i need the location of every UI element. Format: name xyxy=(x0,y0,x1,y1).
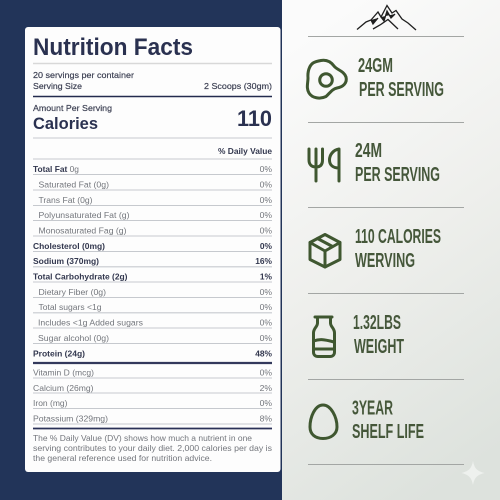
row: sugar alcohol xyxy=(38,333,272,343)
weight text: WEIGHT xyxy=(354,336,404,358)
row: total sugars: Total sugars <1g xyxy=(38,302,102,312)
row: sodium: Sodium (370mg) xyxy=(33,256,99,266)
row: total fat xyxy=(33,164,272,174)
footnote: serving contributes to your daily diet. 2,000 calories per day is xyxy=(33,443,272,453)
serving size: 2 Scoops (30gm) xyxy=(204,81,272,91)
shelf life text: 3YEAR xyxy=(352,398,393,420)
row: sugar alcohol: 0% xyxy=(260,333,272,343)
panel: nutrition facts label xyxy=(25,27,280,472)
row: total sugars xyxy=(38,302,272,312)
icon: fork and spoon xyxy=(309,149,339,181)
calories: 110 xyxy=(237,106,272,131)
row: cholesterol xyxy=(33,241,273,251)
icon: sparkle xyxy=(462,461,484,485)
row: added sugars xyxy=(38,318,272,328)
icon: bottle xyxy=(314,317,334,356)
row: total sugars: 0% xyxy=(260,302,272,312)
row: monosaturated fat xyxy=(38,226,272,236)
daily value heading: % Daily Value xyxy=(218,146,272,156)
item: protein xyxy=(307,55,444,101)
item: per serving xyxy=(309,140,440,186)
row: total fat: 0% xyxy=(260,164,272,174)
dividers xyxy=(308,36,464,464)
right background panel xyxy=(282,0,500,500)
serving size: Serving Size xyxy=(33,81,82,91)
weight text xyxy=(353,312,404,358)
row: vitamin d: 0% xyxy=(260,368,272,378)
item: weight xyxy=(314,312,404,358)
row: saturated fat xyxy=(38,180,272,190)
row: iron: 0% xyxy=(260,398,272,408)
row: protein: 48% xyxy=(255,348,273,358)
footnote: The % Daily Value (DV) shows how much a nutrient in one xyxy=(33,433,252,443)
protein text: 24GM xyxy=(358,55,393,77)
item: shelf life xyxy=(310,398,424,443)
row: sodium: 16% xyxy=(255,256,273,266)
calories text: WERVING xyxy=(355,250,415,272)
row: dietary fiber xyxy=(38,287,272,297)
icon: mountains xyxy=(357,6,416,30)
row: sugar alcohol: Sugar alcohol (0g) xyxy=(38,333,109,343)
row: vitamin d xyxy=(33,368,272,378)
servings per container: 20 servings per container xyxy=(33,70,134,80)
shelf life text xyxy=(352,398,424,443)
serving size xyxy=(33,81,272,91)
row: saturated fat: 0% xyxy=(260,180,272,190)
row: calcium: Calcium (26mg) xyxy=(33,383,94,393)
footnote xyxy=(33,433,272,463)
left navy background panel xyxy=(0,0,282,500)
row: total carbohydrate: Total Carbohydrate (2g) xyxy=(33,272,128,282)
row: polyunsaturated fat xyxy=(38,210,272,220)
row: protein xyxy=(33,348,273,358)
row: vitamin d: Vitamin D (mcg) xyxy=(33,368,94,378)
row: polyunsaturated fat: 0% xyxy=(260,210,272,220)
row: iron: Iron (mg) xyxy=(33,398,68,408)
row: dietary fiber: Dietary Fiber (0g) xyxy=(38,287,106,297)
shelf life text: SHELF LIFE xyxy=(352,421,424,443)
calories text: 110 CALORIES xyxy=(355,226,441,248)
row: iron xyxy=(33,398,272,408)
row: trans fat xyxy=(38,195,272,205)
per serving text xyxy=(355,140,440,186)
row: cholesterol: 0% xyxy=(260,241,273,251)
weight text: 1.32LBS xyxy=(353,312,401,334)
protein text: PER SERVING xyxy=(359,79,444,101)
calories xyxy=(33,106,272,133)
row: cholesterol: Cholesterol (0mg) xyxy=(33,241,105,251)
amount per serving: Amount Per Serving xyxy=(33,103,112,113)
row: added sugars: 0% xyxy=(260,318,272,328)
calories: Calories xyxy=(33,114,98,133)
row: sodium xyxy=(33,256,273,266)
row: polyunsaturated fat: Polyunsaturated Fat (g) xyxy=(38,210,130,220)
row: monosaturated fat: Monosaturated Fag (g) xyxy=(38,226,127,236)
protein text xyxy=(358,55,444,101)
row: trans fat: Trans Fat (0g) xyxy=(38,195,93,205)
row: calcium xyxy=(33,383,272,393)
icon: fried egg xyxy=(307,60,346,98)
row: monosaturated fat: 0% xyxy=(260,226,272,236)
per serving text: 24M xyxy=(355,140,382,162)
row: trans fat: 0% xyxy=(260,195,272,205)
item: calories xyxy=(310,226,441,272)
row: saturated fat: Saturated Fat (0g) xyxy=(38,180,109,190)
footnote: the general reference used for nutrition advice. xyxy=(33,453,212,463)
row: total carbohydrate: 1% xyxy=(260,272,273,282)
row: potassium xyxy=(33,414,272,424)
row: total carbohydrate xyxy=(33,272,273,282)
row: protein: Protein (24g) xyxy=(33,348,85,358)
title: Nutrition Facts xyxy=(33,34,193,61)
calories text xyxy=(355,226,441,272)
row: calcium: 2% xyxy=(260,383,272,393)
icon: egg xyxy=(310,405,337,438)
row: added sugars: Includes <1g Added sugars xyxy=(38,318,143,328)
row: dietary fiber: 0% xyxy=(260,287,272,297)
per serving text: PER SERVING xyxy=(355,164,440,186)
row: total fat: Total Fat 0g xyxy=(33,164,79,174)
row: potassium: Potassium (329mg) xyxy=(33,414,108,424)
row: potassium: 8% xyxy=(260,414,272,424)
icon: box xyxy=(310,234,340,267)
table rows xyxy=(33,164,273,424)
